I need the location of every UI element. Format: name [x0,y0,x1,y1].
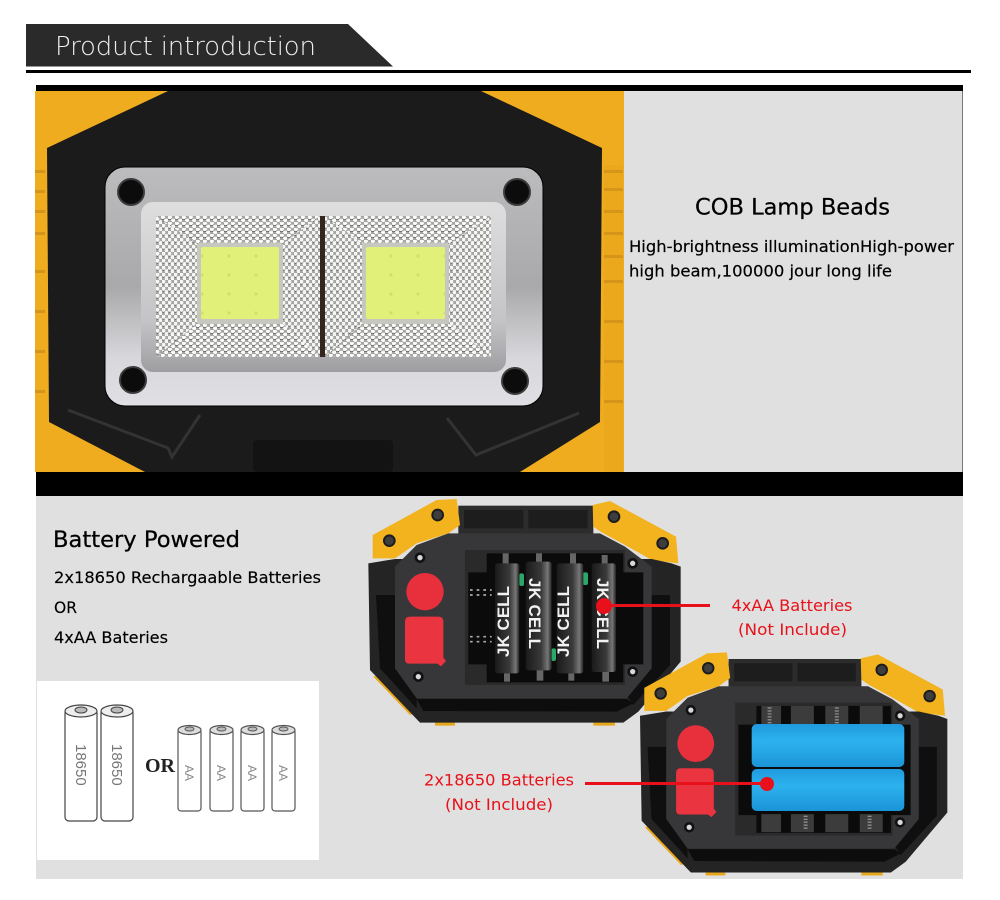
title: Product introduction [55,32,316,62]
battery options text: 2x18650 Rechargaable Batteries [54,568,321,587]
callout: 18650: 2x18650 Batteries [424,770,574,790]
18650 cell 1: 18650 [72,744,89,786]
callout: AA: 4xAA Batteries [732,596,852,615]
AA cell 1 [178,726,201,811]
panel: battery section [36,496,963,879]
18650 cell 2 [101,705,133,821]
battery options text: 4xAA Bateries [54,628,168,647]
right LED [362,243,449,324]
18650 cell 2: 18650 [108,744,125,786]
AA cell labels: JK CELL [494,586,513,657]
header banner [26,24,393,66]
AA cell 3: AA [245,765,259,781]
AA cell 3 [241,726,264,811]
callout: 18650 [424,770,774,814]
panel: COB lamp photo [35,85,963,472]
header tab [26,24,393,66]
lamp with AA batteries [368,499,681,726]
left reflector [156,216,320,357]
18650 cell upper [752,724,904,767]
inner frame [141,202,506,372]
screws [118,179,530,394]
AA cell 2: AA [214,765,228,781]
callout: 18650: (Not Include) [445,795,553,814]
lamp with 18650 batteries [640,652,947,875]
callout: AA: (Not Include) [738,620,847,639]
AA cell 4: AA [276,765,290,781]
description text: High-brightness illuminationHigh-power [629,237,954,256]
AA cell 1: AA [182,765,196,781]
description text [629,237,954,280]
battery diagram [37,681,319,860]
AA cell 4 [272,726,295,811]
left LED [197,243,283,324]
18650 cell 1 [65,705,97,821]
AA cell labels: JK CELL [593,578,612,649]
battery options text [54,568,321,647]
18650 cell lower [752,769,904,811]
AA cell labels: JK CELL [554,586,573,657]
AA cell labels [494,578,612,657]
heading: COB Lamp Beads: COB Lamp Beads [695,196,890,220]
battery options text: OR [54,598,77,617]
OR label: OR [145,755,176,777]
heading: Battery Powered: Battery Powered [53,528,240,553]
callout: AA [596,596,852,639]
description text: high beam,100000 jour long life [629,262,892,280]
AA cell labels: JK CELL [525,578,544,649]
right reflector [325,216,491,357]
AA cell 2 [210,726,233,811]
metal plate [105,167,543,406]
panel: COB description [624,91,963,472]
lamp housing [47,91,602,472]
